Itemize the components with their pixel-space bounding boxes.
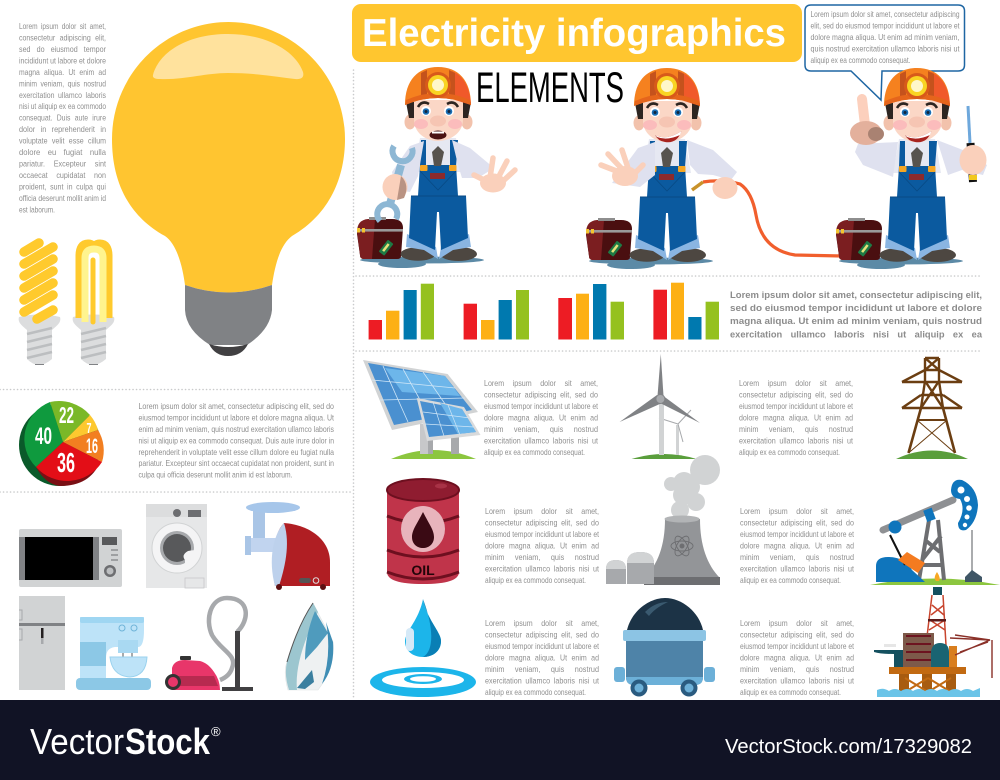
text block: solar: Lorem ipsum dolor sit amet, [484, 378, 598, 388]
text block: oil: aliquip ex ea commodo consequat. [485, 575, 586, 585]
icon: nuclear plant [606, 455, 720, 585]
icon: stand mixer [76, 617, 151, 690]
text block: oil: exercitation ullamco laboris nisi ut [485, 564, 600, 574]
text block: top left: exercitation ullamco laboris [19, 90, 106, 100]
pie chart: 22 [59, 402, 74, 428]
icon: coal cart [614, 598, 715, 696]
text block: bar charts: Lorem ipsum dolor sit amet, consectetur adipiscing elit, [730, 290, 982, 301]
text block: top left: pariatur. Excepteur sint [19, 159, 107, 169]
text block: bar charts: magna aliqua. Ut enim ad minim veniam, quis nostrud [730, 316, 982, 327]
pie chart: 16 [86, 435, 98, 458]
text block: coal: consectetur adipiscing elit, sed do [740, 630, 854, 640]
text block: nuclear: consectetur adipiscing elit, sed do [740, 518, 854, 528]
hand [601, 150, 643, 176]
speech bubble callout: dolore magna aliqua. Ut enim ad minim veniam, [810, 32, 960, 42]
text block: pie: reprehenderit in voluptate velit esse cillum dolore eu fugiat nulla [138, 447, 334, 457]
text block: top left: dolore eu fugiat nulla [19, 147, 106, 157]
text block: top left: incididunt ut labore et dolore [19, 55, 106, 65]
text block: wind: exercitation ullamco laboris nisi ut [739, 436, 854, 446]
text block: water: aliquip ex ea commodo consequat. [485, 687, 586, 697]
icon: oil barrel: OIL [411, 562, 435, 578]
text block: nuclear [740, 506, 855, 585]
cable [703, 181, 842, 256]
icon: microwave [19, 529, 122, 587]
text block: top left: proident, sunt in culpa qui [19, 181, 106, 191]
text block: nuclear: Lorem ipsum dolor sit amet, [740, 506, 854, 516]
footer logo [30, 721, 221, 762]
text block: pie: enim ad minim veniam, quis nostrud exercitation ullamco laboris [138, 424, 334, 434]
pie chart: 40 [35, 423, 52, 450]
text block: pie: culpa qui officia deserunt mollit anim id est laborum. [138, 470, 292, 480]
text block: top left: occaecat cupidatat non [19, 170, 106, 180]
divider lines [0, 70, 980, 697]
bar chart group 2 [464, 290, 529, 340]
text block: solar: minim veniam, quis nostrud [484, 424, 598, 434]
text block: coal: dolore magna aliqua. Ut enim ad [740, 652, 854, 662]
text block: top left: sed do eiusmod tempor [19, 44, 106, 54]
speech bubble callout: elit, sed do eiusmod tempor incididunt ut labore et [810, 20, 960, 30]
text block: top left: voluptate velit esse cillum [19, 136, 106, 146]
text block: top left: officia deserunt mollit anim id [19, 193, 106, 203]
finger [850, 99, 884, 145]
text block: top left: magna aliqua. Ut enim ad [19, 67, 106, 77]
footer logo: Vector [30, 721, 124, 762]
text block: water: dolore magna aliqua. Ut enim ad [485, 652, 599, 662]
icon: washing machine [146, 504, 207, 588]
text block: nuclear: dolore magna aliqua. Ut enim ad [740, 540, 854, 550]
text block: oil [485, 506, 600, 585]
text block: bar charts [730, 290, 983, 340]
icon: spiral CFL bulb [19, 243, 60, 365]
speech bubble callout [805, 5, 964, 100]
text block: solar: dolore magna aliqua. Ut enim ad [484, 412, 598, 422]
text block: solar: aliquip ex ea commodo consequat. [484, 447, 585, 457]
text block: oil: dolore magna aliqua. Ut enim ad [485, 540, 599, 550]
bar chart group 3 [558, 284, 624, 340]
text block: water: consectetur adipiscing elit, sed do [485, 630, 599, 640]
text block: water: eiusmod tempor incididunt ut labore et [485, 641, 599, 651]
text block: coal: aliquip ex ea commodo consequat. [740, 687, 841, 697]
text block: pie [138, 401, 334, 480]
text block: wind: minim veniam, quis nostrud [739, 424, 853, 434]
text block: water [485, 618, 600, 697]
text block: wind: consectetur adipiscing elit, sed do [739, 390, 853, 400]
text block: coal: exercitation ullamco laboris nisi ut [740, 676, 855, 686]
text block: coal: eiusmod tempor incididunt ut labore et [740, 641, 854, 651]
text block: solar [484, 378, 599, 457]
text block: water: Lorem ipsum dolor sit amet, [485, 618, 599, 628]
text block: pie: nisi ut aliquip ex ea commodo consequat. Duis aute irure dolor in [138, 435, 334, 445]
text block: wind: dolore magna aliqua. Ut enim ad [739, 412, 853, 422]
text block: top left: consequat. Duis aute irure [19, 113, 106, 123]
speech bubble callout: quis nostrud exercitation ullamco laboris nisi ut [810, 44, 960, 54]
icon: wind turbines [620, 354, 700, 459]
icon: tube CFL bulb [73, 244, 114, 365]
text block: top left: consectetur adipiscing elit, [19, 32, 106, 42]
screwdriver [968, 106, 977, 182]
text block: nuclear: eiusmod tempor incididunt ut labore et [740, 529, 854, 539]
icon: offshore oil rig [874, 572, 992, 697]
text block: wind: Lorem ipsum dolor sit amet, [739, 378, 853, 388]
icon: steam iron [285, 603, 333, 690]
worker 2 with cable [586, 68, 842, 269]
sleeves [612, 140, 737, 187]
speech bubble callout: aliquip ex ea commodo consequat. [810, 55, 910, 65]
text block: solar: exercitation ullamco laboris nisi ut [484, 436, 599, 446]
text block: pie: eiusmod tempor incididunt ut labore et dolore magna aliqua. Ut [138, 412, 334, 422]
speech bubble callout: Lorem ipsum dolor sit amet, consectetur adipiscing [810, 9, 960, 19]
icon: pump jack [870, 480, 1000, 585]
text block: top left: Lorem ipsum dolor sit amet, [19, 21, 106, 31]
pie chart [19, 401, 104, 486]
icon: refrigerator [19, 596, 65, 690]
text block: nuclear: exercitation ullamco laboris nisi ut [740, 564, 855, 574]
text block: coal [740, 618, 855, 697]
mouth [430, 130, 446, 140]
text block: wind [739, 378, 854, 457]
open hand [474, 158, 515, 182]
text block: pie: Lorem ipsum dolor sit amet, consectetur adipiscing elit, sed do [138, 401, 334, 411]
text block: wind: aliquip ex ea commodo consequat. [739, 447, 840, 457]
text block: bar charts: exercitation ullamco laboris nisi ut aliquip ex ea [730, 330, 983, 340]
footer band [0, 700, 1000, 780]
text block: nuclear: minim veniam, quis nostrud [740, 552, 854, 562]
text block: top left: dolor in reprehenderit in [19, 124, 106, 134]
text block: top left: est laborum. [19, 204, 55, 214]
text block: top left: minim veniam, quis nostrud [19, 78, 106, 88]
subtitle: ELEMENTS: ELEMENTS [476, 64, 624, 112]
icon: vacuum cleaner [165, 598, 253, 691]
footer url: VectorStock.com/17329082 [725, 735, 972, 758]
text block: pie: pariatur. Excepteur sint occaecat cupidatat non proident, sunt in [138, 458, 334, 468]
text block: coal: minim veniam, quis nostrud [740, 664, 854, 674]
text block: oil: eiusmod tempor incididunt ut labore et [485, 529, 599, 539]
large light bulb [112, 22, 345, 356]
text block: water: exercitation ullamco laboris nisi ut [485, 676, 600, 686]
icon: solar panels [363, 360, 480, 459]
text block: nuclear: aliquip ex ea commodo consequat. [740, 575, 841, 585]
bar chart group 1 [369, 284, 434, 340]
text block: solar: eiusmod tempor incididunt ut labore et [484, 401, 598, 411]
sleeves [392, 140, 494, 192]
text block: wind: eiusmod tempor incididunt ut labore et [739, 401, 853, 411]
icon: oil barrel [387, 479, 459, 584]
icon: meat grinder [245, 502, 330, 590]
text block: oil: minim veniam, quis nostrud [485, 552, 599, 562]
text block: oil: consectetur adipiscing elit, sed do [485, 518, 599, 528]
wrench [377, 146, 413, 221]
worker 1 with wrench [357, 67, 515, 268]
text block: top left: nisi ut aliquip ex ea commodo [19, 101, 106, 111]
text block: top left [19, 21, 107, 214]
icon: water drop [370, 599, 476, 697]
text block: bar charts: sed do eiusmod tempor incididunt ut labore et dolore [730, 303, 982, 314]
text block: oil: Lorem ipsum dolor sit amet, [485, 506, 599, 516]
sleeves [855, 140, 987, 177]
worker 3 with screwdriver [836, 68, 987, 269]
icon: power pylon [896, 358, 968, 459]
text block: coal: Lorem ipsum dolor sit amet, [740, 618, 854, 628]
pie chart: 36 [57, 447, 75, 478]
text block: solar: consectetur adipiscing elit, sed do [484, 390, 598, 400]
bar chart group 4 [653, 283, 719, 340]
footer logo: Stock [125, 721, 211, 762]
footer logo: ® [211, 724, 221, 739]
text block: water: minim veniam, quis nostrud [485, 664, 599, 674]
pie chart: 7 [86, 420, 92, 437]
title banner: Electricity infographics [362, 12, 786, 55]
